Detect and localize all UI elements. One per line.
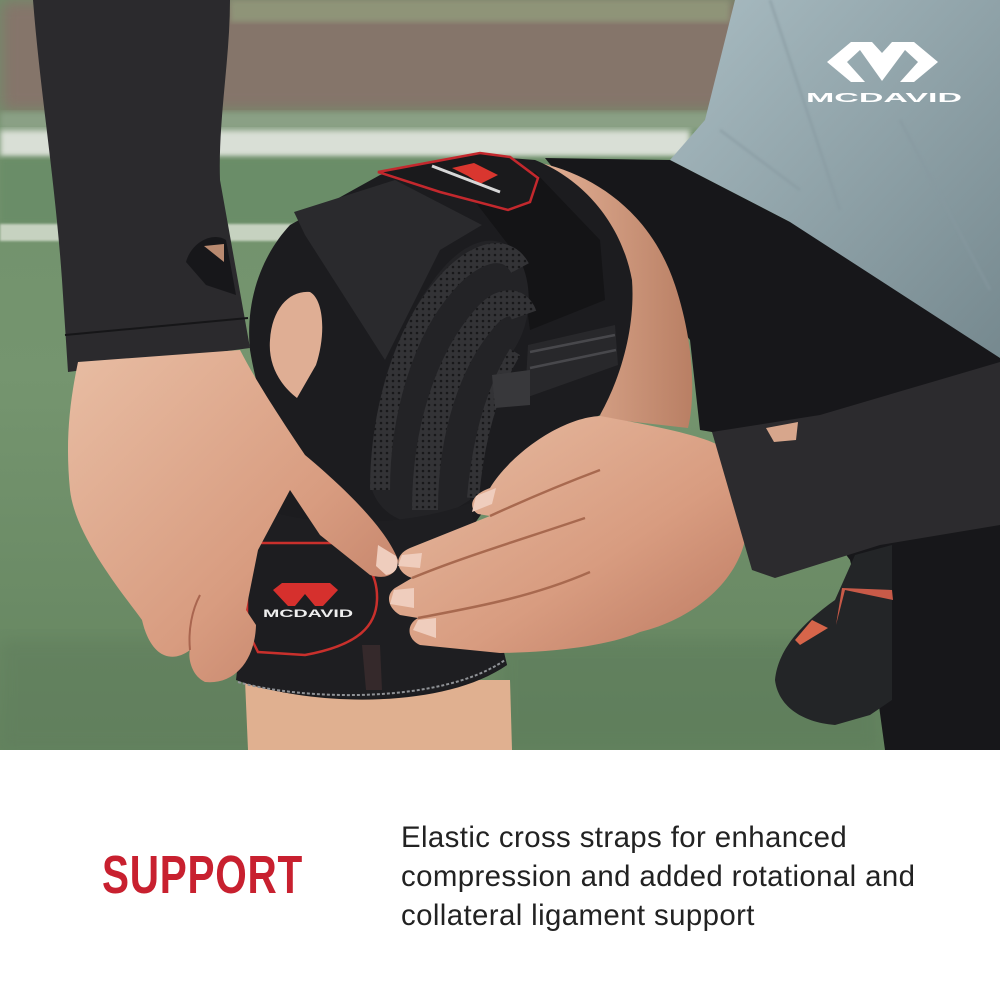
body text: Elastic cross straps for enhanced — [401, 821, 847, 854]
lower cuff — [236, 503, 507, 698]
right sleeve — [712, 362, 1000, 578]
heading: SUPPORT — [102, 845, 303, 905]
knee brace — [236, 153, 633, 700]
photo: knee brace being fastened on a sports field — [0, 0, 1000, 750]
dark velcro panel — [470, 172, 605, 330]
side straps — [525, 325, 618, 398]
lower strap tab — [247, 543, 377, 655]
lower strap tab: MCDAVID — [263, 608, 353, 620]
brace body — [240, 155, 633, 700]
thigh skin — [525, 160, 692, 428]
finger separations — [412, 470, 600, 618]
knee gel buttress — [372, 241, 529, 525]
top strap tab — [378, 153, 538, 210]
background: blurred field and embankment — [0, 0, 1000, 750]
McDavid logo — [806, 42, 962, 105]
left hand — [68, 350, 398, 682]
lower leg skin — [245, 680, 512, 750]
right hand — [389, 416, 746, 653]
body text: compression and added rotational and — [401, 860, 915, 893]
shirt — [670, 0, 1000, 358]
McDavid logo: MCDAVID — [806, 90, 962, 105]
upper strap — [294, 180, 482, 360]
body text: collateral ligament support — [401, 899, 755, 932]
patella opening — [270, 292, 322, 398]
left sleeve — [33, 0, 250, 372]
shorts — [545, 158, 1000, 750]
fingernails — [472, 488, 496, 512]
body text — [401, 821, 915, 932]
cleat in background — [775, 545, 893, 725]
thumbnail — [376, 545, 398, 575]
